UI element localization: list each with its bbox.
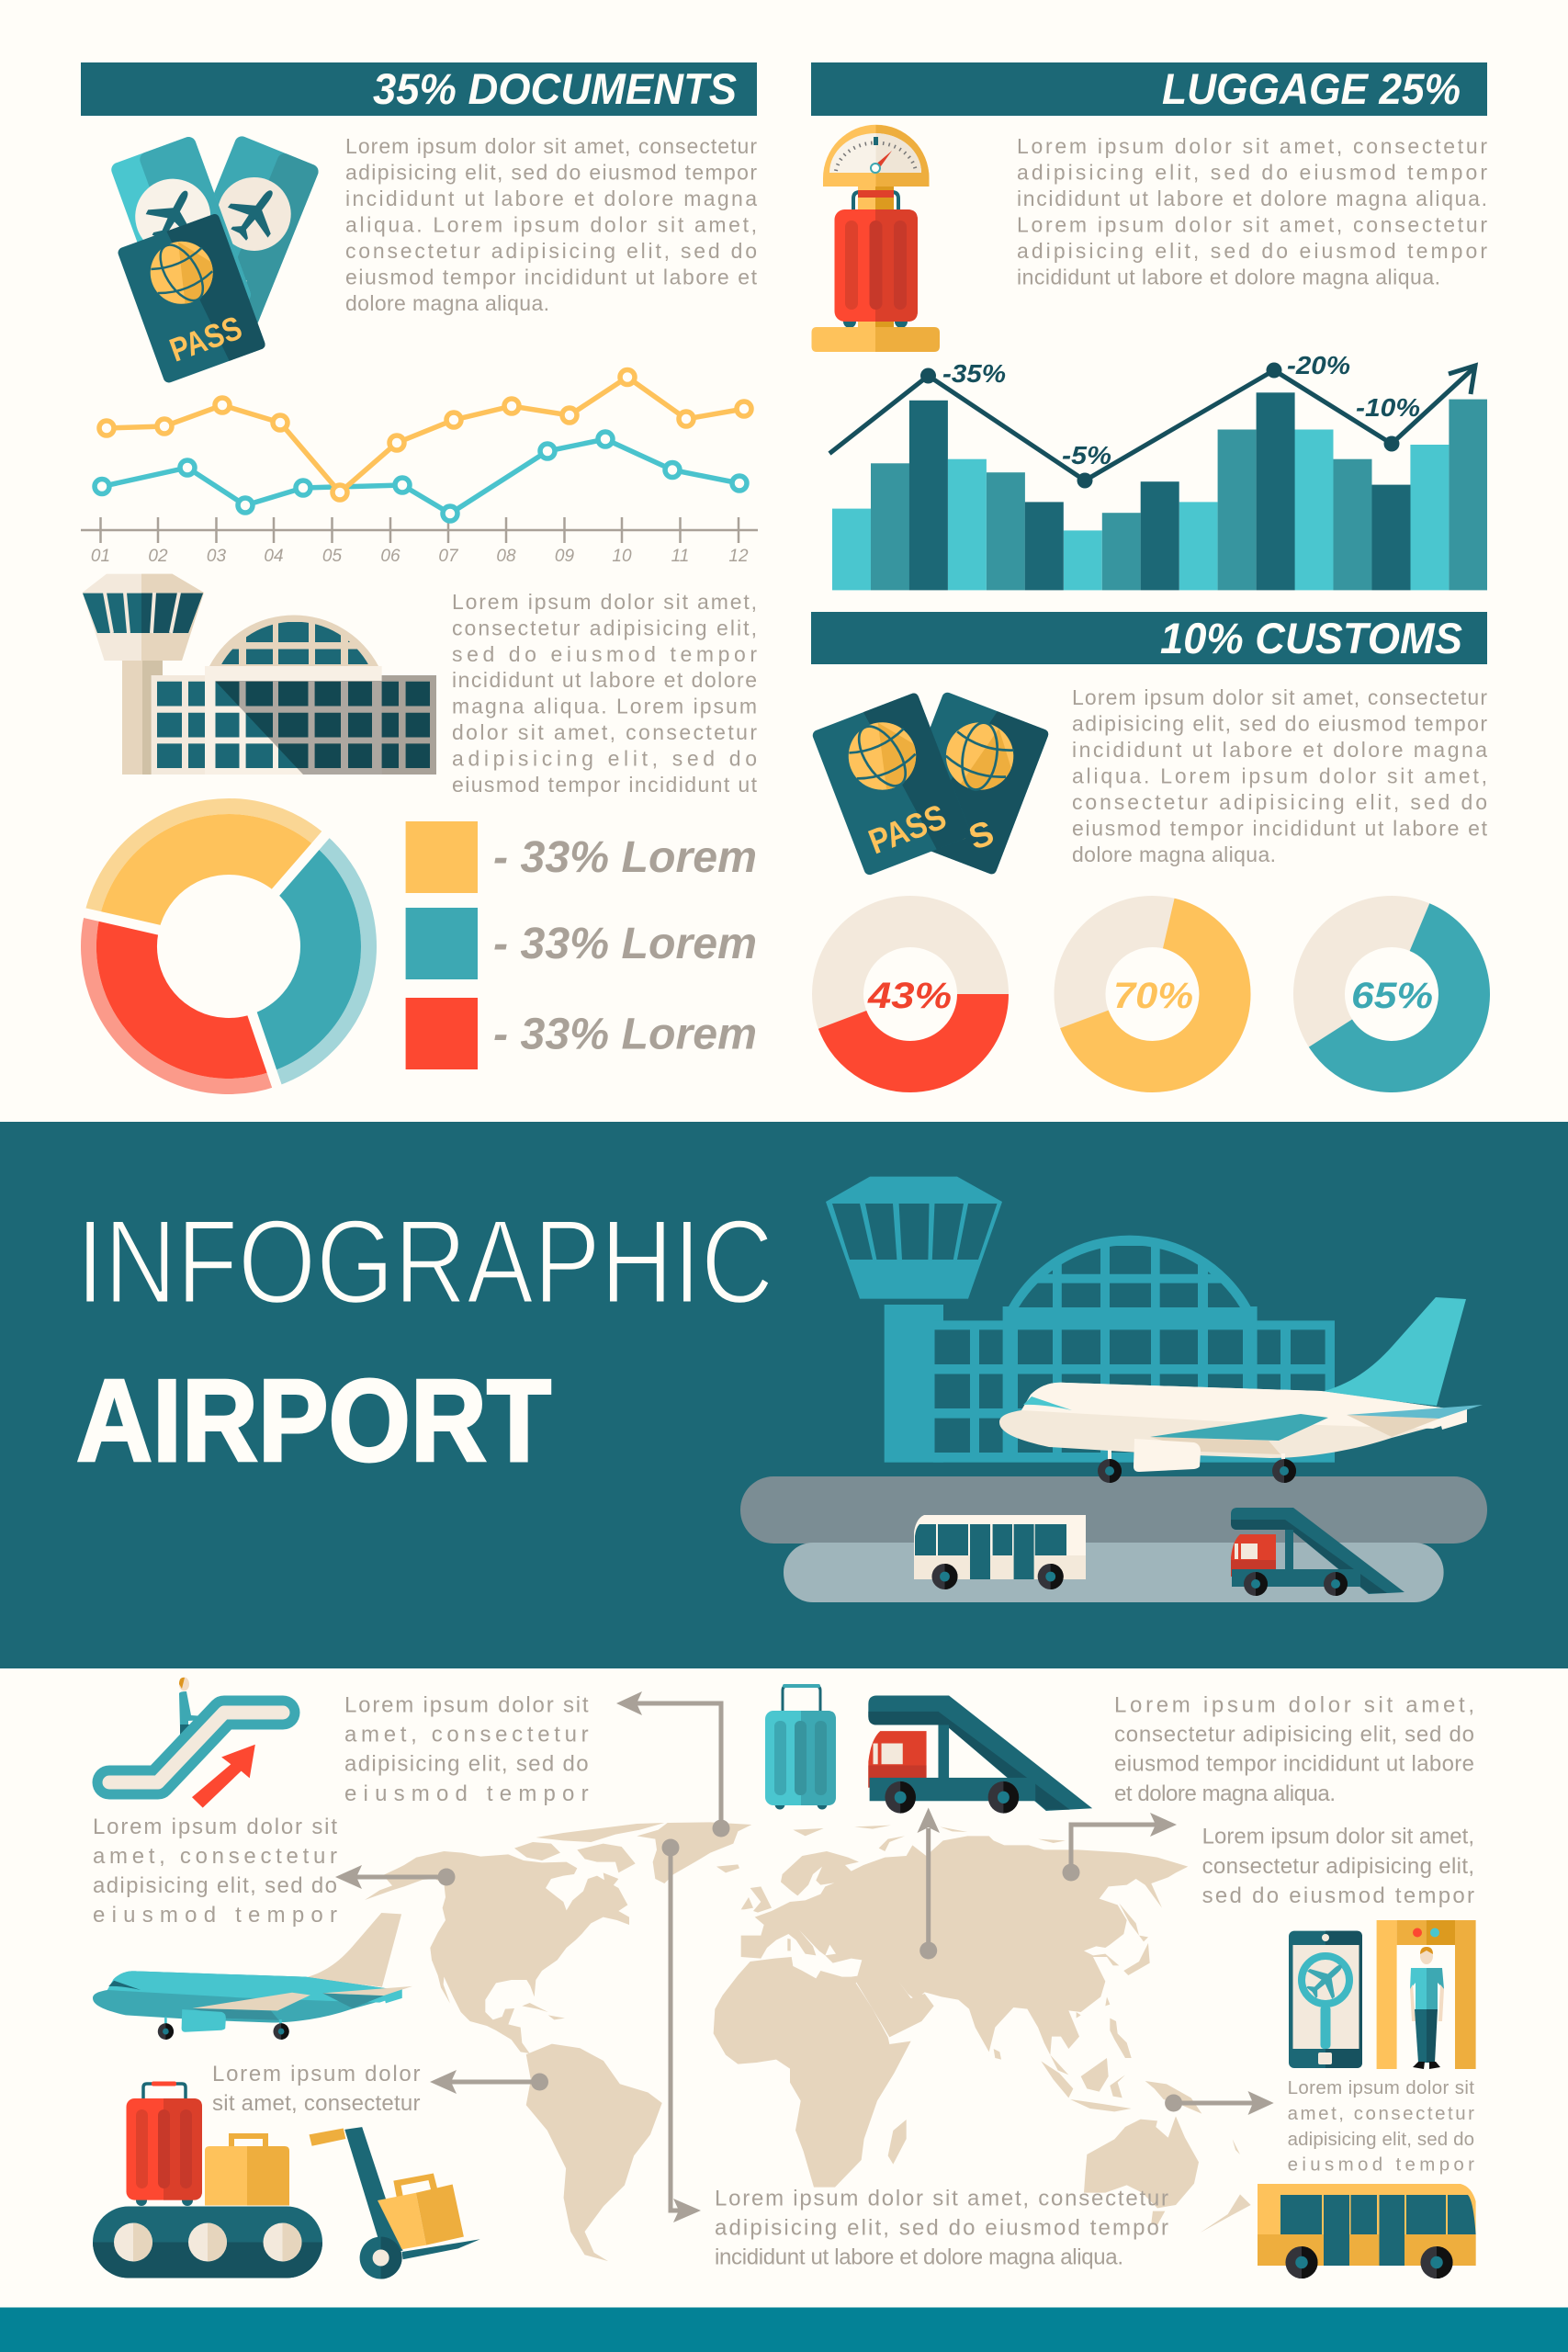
text block: lower right: eiusmod tempor xyxy=(1288,2154,1474,2176)
text block: left under escalator xyxy=(93,1815,337,1928)
panel: documents heading: 35% DOCUMENTS xyxy=(373,64,737,113)
text block: terminal: incididunt ut labore et dolore xyxy=(452,668,757,692)
trend labels: -10% xyxy=(1356,393,1420,422)
text block: terminal: eiusmod tempor incididunt ut xyxy=(452,773,758,797)
text block: left under escalator: adipisicing elit, sed do xyxy=(93,1873,337,1898)
text block: luggage: adipisicing elit, sed do eiusmod tempor xyxy=(1017,160,1487,184)
text block: left under escalator: eiusmod tempor xyxy=(93,1903,337,1928)
text block: documents: aliqua. Lorem ipsum dolor sit amet, xyxy=(345,213,757,237)
text block: right xyxy=(1202,1825,1474,1908)
axis labels xyxy=(91,547,749,566)
text block: customs: Lorem ipsum dolor sit amet, consectetur xyxy=(1072,685,1487,709)
text block: escalator right: eiusmod tempor xyxy=(344,1781,589,1806)
illustration: stair truck xyxy=(1231,1508,1404,1596)
arrow: south america xyxy=(430,2070,548,2094)
icon: yellow bus xyxy=(1258,2184,1476,2278)
axis labels: 12 xyxy=(728,547,749,566)
panel: documents heading xyxy=(81,62,757,116)
text block: terminal: Lorem ipsum dolor sit amet, xyxy=(452,590,757,614)
text block: lower right: Lorem ipsum dolor sit xyxy=(1288,2077,1474,2098)
text block: luggage: adipisicing elit, sed do eiusmod tempor xyxy=(1017,239,1487,263)
text block: top right: consectetur adipisicing elit, sed do xyxy=(1114,1722,1474,1747)
text block: customs: aliqua. Lorem ipsum dolor sit amet, xyxy=(1072,764,1487,788)
text block: right: consectetur adipisicing elit, xyxy=(1202,1854,1474,1879)
text block: top right xyxy=(1114,1692,1474,1806)
text block: lower right xyxy=(1288,2077,1474,2176)
pie: 65% xyxy=(1297,899,1486,1089)
donut chart xyxy=(31,749,426,1144)
panel: banner xyxy=(0,1122,1568,1668)
series: teal xyxy=(95,432,747,521)
text block: terminal: adipisicing elit, sed do xyxy=(452,746,757,770)
title: INFOGRAPHIC xyxy=(76,1194,773,1329)
text block: top right: Lorem ipsum dolor sit amet, xyxy=(1114,1692,1474,1717)
trend markers xyxy=(920,362,1400,489)
axis labels: 03 xyxy=(207,547,226,566)
axis labels: 06 xyxy=(380,547,400,566)
icon: tickets and passport xyxy=(109,134,321,384)
text block: luggage xyxy=(1017,134,1487,288)
axis labels: 01 xyxy=(91,547,110,566)
axis labels: 08 xyxy=(496,547,516,566)
illustration: runways xyxy=(740,1476,1487,1602)
map: africa and eurasia xyxy=(714,1826,1251,2233)
text block: documents xyxy=(345,134,758,315)
legend xyxy=(406,821,757,1069)
icon: hand truck xyxy=(310,2127,480,2278)
text block: top right: eiusmod tempor incididunt ut labore xyxy=(1114,1752,1474,1777)
text block: documents: dolore magna aliqua. xyxy=(345,291,549,315)
pie: 70% xyxy=(1066,907,1239,1081)
text block: right: Lorem ipsum dolor sit amet, xyxy=(1202,1825,1474,1849)
text block: lower right: amet, consectetur xyxy=(1288,2103,1474,2124)
icon: tickets and passport: PT xyxy=(205,263,249,304)
arrow: east asia xyxy=(1062,1813,1177,1882)
icon: teal airplane xyxy=(93,1913,412,2040)
bar chart xyxy=(829,351,1487,590)
text block: documents: Lorem ipsum dolor sit amet, consectetur xyxy=(345,134,757,158)
text block: south america xyxy=(212,2062,421,2116)
trend labels: -20% xyxy=(1287,351,1350,379)
text block: terminal: sed do eiusmod tempor xyxy=(452,642,757,666)
icon: tickets and passport: PASS xyxy=(164,309,247,369)
icon: tower and terminal xyxy=(83,574,436,775)
arrow: down to lower text xyxy=(661,1839,701,2222)
illustration: white bus xyxy=(914,1515,1086,1589)
text block: customs: eiusmod tempor incididunt ut labore et xyxy=(1072,816,1488,840)
text block: south america: sit amet, consectetur xyxy=(212,2091,421,2116)
icon: two passports xyxy=(811,691,1050,876)
icon: luggage scale xyxy=(812,125,940,352)
illustration: airplane xyxy=(999,1297,1483,1483)
panel: customs heading: 10% CUSTOMS xyxy=(1160,614,1462,662)
axis labels: 07 xyxy=(438,547,459,566)
axis labels: 10 xyxy=(612,547,632,566)
text block: escalator right: Lorem ipsum dolor sit xyxy=(344,1692,589,1717)
text block: lower centre: incididunt ut labore et dolore magna aliqua. xyxy=(715,2245,1123,2269)
text block: documents: consectetur adipisicing elit, sed do xyxy=(345,239,757,263)
text block: documents: eiusmod tempor incididunt ut labore et xyxy=(345,265,758,288)
text block: escalator right xyxy=(344,1692,589,1806)
text block: luggage: Lorem ipsum dolor sit amet, consectetur xyxy=(1017,134,1487,158)
text block: lower centre: Lorem ipsum dolor sit amet, consectetur xyxy=(715,2187,1168,2211)
title xyxy=(76,1194,773,1486)
panel: luggage heading xyxy=(811,62,1487,116)
text block: luggage: incididunt ut labore et dolore magna aliqua. xyxy=(1017,187,1487,210)
text block: escalator right: adipisicing elit, sed do xyxy=(344,1752,589,1777)
pie: 65%: 65% xyxy=(1351,976,1433,1016)
pie: 43% xyxy=(838,922,983,1067)
trend labels: -5% xyxy=(1062,441,1111,469)
icon: two passports: PASS xyxy=(863,797,952,862)
axis labels: 02 xyxy=(148,547,168,566)
text block: customs: adipisicing elit, sed do eiusmod tempor xyxy=(1072,711,1487,735)
icon: two passports: ’S xyxy=(954,814,999,861)
text block: south america: Lorem ipsum dolor xyxy=(212,2062,421,2086)
text block: terminal xyxy=(452,590,758,797)
illustration: tower and terminal silhouette xyxy=(826,1177,1335,1463)
trend labels xyxy=(942,351,1420,469)
arrow: north america xyxy=(335,1865,456,1889)
icon: phone with magnifier xyxy=(1289,1931,1362,2068)
legend: - 33% Lorem xyxy=(493,920,757,968)
axis labels: 09 xyxy=(555,547,574,566)
arrow: top centre to luggage text xyxy=(616,1691,729,1838)
map: south america xyxy=(526,2044,662,2261)
text block: terminal: consectetur adipisicing elit, xyxy=(452,616,757,639)
panel: luggage heading: LUGGAGE 25% xyxy=(1162,64,1461,113)
arrow: oceania xyxy=(1165,2091,1274,2115)
text block: documents: adipisicing elit, sed do eiusmod tempor xyxy=(345,160,757,184)
text block: left under escalator: Lorem ipsum dolor sit xyxy=(93,1815,337,1839)
pie: 43%: 43% xyxy=(867,976,952,1016)
text block: customs: consectetur adipisicing elit, sed do xyxy=(1072,790,1487,814)
trend arrow xyxy=(829,366,1475,481)
text block: luggage: incididunt ut labore et dolore magna aliqua. xyxy=(1017,265,1440,288)
line chart xyxy=(81,369,758,566)
bottom band xyxy=(0,2308,1568,2352)
panel: customs heading xyxy=(811,612,1487,664)
icon: escalator with person xyxy=(109,1678,283,1808)
text block: top right: et dolore magna aliqua. xyxy=(1114,1781,1336,1806)
legend: - 33% Lorem xyxy=(493,1011,757,1058)
axis labels: 05 xyxy=(322,547,342,566)
text block: documents: incididunt ut labore et dolore magna xyxy=(345,187,757,210)
text block: customs: dolore magna aliqua. xyxy=(1072,842,1276,866)
title: AIRPORT xyxy=(76,1355,551,1486)
text block: escalator right: amet, consectetur xyxy=(344,1722,589,1747)
arrow: asia up xyxy=(917,1808,940,1959)
trend labels: -35% xyxy=(942,359,1006,388)
text block: lower centre: adipisicing elit, sed do eiusmod tempor xyxy=(715,2216,1168,2241)
text block: customs xyxy=(1072,685,1488,866)
icon: baggage conveyor xyxy=(93,2082,322,2278)
text block: terminal: dolor sit amet, consectetur xyxy=(452,720,757,744)
text block: luggage: Lorem ipsum dolor sit amet, consectetur xyxy=(1017,213,1487,237)
series: yellow xyxy=(99,369,751,500)
icon: teal suitcase xyxy=(765,1684,836,1810)
text block: left under escalator: amet, consectetur xyxy=(93,1844,337,1869)
text block: terminal: magna aliqua. Lorem ipsum xyxy=(452,695,757,718)
legend: - 33% Lorem xyxy=(493,833,757,882)
icon: stair truck large xyxy=(868,1695,1092,1814)
text block: right: sed do eiusmod tempor xyxy=(1202,1883,1474,1908)
axis labels: 04 xyxy=(264,547,284,566)
pie: 70%: 70% xyxy=(1113,976,1193,1016)
world map xyxy=(365,1822,1251,2261)
icon: security gate with person xyxy=(1377,1920,1476,2069)
map: north america and greenland xyxy=(365,1822,751,2053)
text block: customs: incididunt ut labore et dolore magna xyxy=(1072,738,1487,762)
axis labels: 11 xyxy=(671,547,689,566)
text block: lower right: adipisicing elit, sed do xyxy=(1288,2129,1474,2150)
text block: lower centre xyxy=(715,2187,1168,2269)
